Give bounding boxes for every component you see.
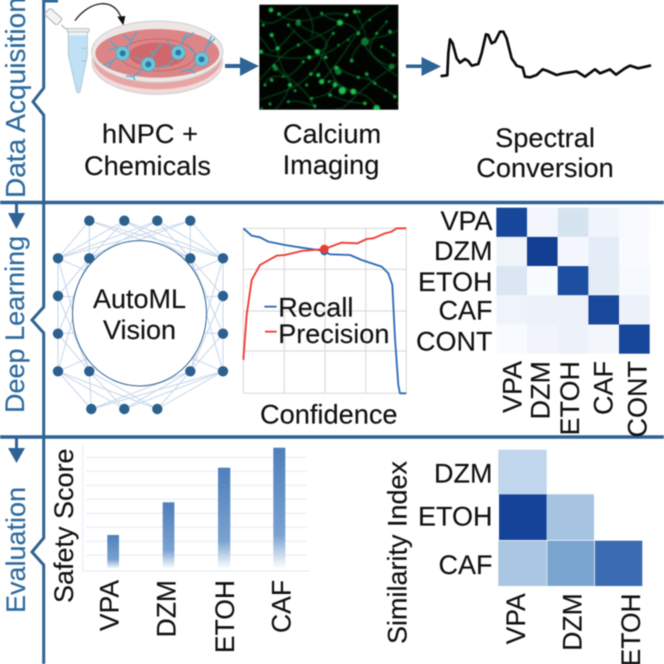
icon: tube, dish and neurons xyxy=(44,4,223,94)
line chart: recall and precision: Precision xyxy=(278,319,389,349)
heatmap: confusion matrix: ETOH xyxy=(418,267,492,297)
heatmap: confusion matrix xyxy=(416,206,653,438)
heatmap: confusion matrix: CONT xyxy=(416,327,492,357)
icon: curved arrow xyxy=(75,4,125,25)
section label: Evaluation: Evaluation xyxy=(1,487,31,613)
diagram: AutoML Vision network: Vision xyxy=(103,315,176,345)
diagram: AutoML Vision network xyxy=(53,216,228,414)
section label: Data Acquisition: Data Acquisition xyxy=(0,0,31,198)
heatmap: similarity index: VPA xyxy=(501,593,531,644)
line chart: recall and precision: Confidence xyxy=(260,398,398,429)
bar chart: safety score: VPA xyxy=(94,580,124,631)
line chart: recall and precision: Recall xyxy=(278,293,353,323)
bar chart: safety score: DZM xyxy=(152,580,182,637)
image: calcium imaging micrograph xyxy=(259,5,399,112)
text: hNPC + Chemicals: hNPC + xyxy=(102,118,198,149)
arrow: to evaluation xyxy=(8,438,25,463)
line chart: spectral trace xyxy=(442,32,650,77)
line chart: recall and precision xyxy=(243,228,406,429)
panel: data acquisition xyxy=(44,4,650,183)
heatmap: confusion matrix: VPA xyxy=(440,206,492,236)
heatmap: confusion matrix: CAF xyxy=(438,296,492,326)
icon: microtube xyxy=(44,8,89,93)
arrow: to deep learning xyxy=(8,203,25,229)
text: Calcium Imaging: Calcium xyxy=(283,118,381,149)
icon: petri dish xyxy=(92,21,223,94)
heatmap: similarity index: ETOH xyxy=(418,502,492,532)
bar chart: safety score: CAF xyxy=(267,580,297,633)
arrow: dish to imaging xyxy=(225,57,259,76)
heatmap: confusion matrix: CAF xyxy=(589,361,619,415)
bar chart: safety score xyxy=(49,445,310,653)
text: Spectral Conversion: Conversion xyxy=(476,152,614,183)
heatmap: similarity index: DZM xyxy=(434,459,492,489)
heatmap: confusion matrix: ETOH xyxy=(555,361,585,436)
heatmap: similarity index: Similarity Index xyxy=(383,460,413,644)
text: Spectral Conversion: Spectral xyxy=(495,122,595,153)
diagram: AutoML Vision network: AutoML xyxy=(93,284,186,314)
heatmap: confusion matrix: DZM xyxy=(525,361,555,419)
icon: neurons xyxy=(103,32,215,80)
section label: Deep Learning: Deep Learning xyxy=(0,236,30,413)
bar chart: safety score: ETOH xyxy=(210,580,240,653)
heatmap: similarity index: DZM xyxy=(558,593,588,651)
text: Calcium Imaging: Imaging xyxy=(283,149,379,180)
heatmap: similarity index xyxy=(383,450,646,664)
heatmap: confusion matrix: CONT xyxy=(623,361,653,438)
heatmap: confusion matrix: DZM xyxy=(434,236,492,266)
heatmap: similarity index: CAF xyxy=(438,550,492,580)
panel: deep learning xyxy=(53,206,653,438)
panel: evaluation xyxy=(49,445,646,664)
text: hNPC + Chemicals: Chemicals xyxy=(84,150,211,181)
arrow: imaging to spectrum xyxy=(406,57,441,76)
heatmap: confusion matrix: VPA xyxy=(498,361,528,413)
bar chart: safety score: Safety Score xyxy=(49,448,79,603)
